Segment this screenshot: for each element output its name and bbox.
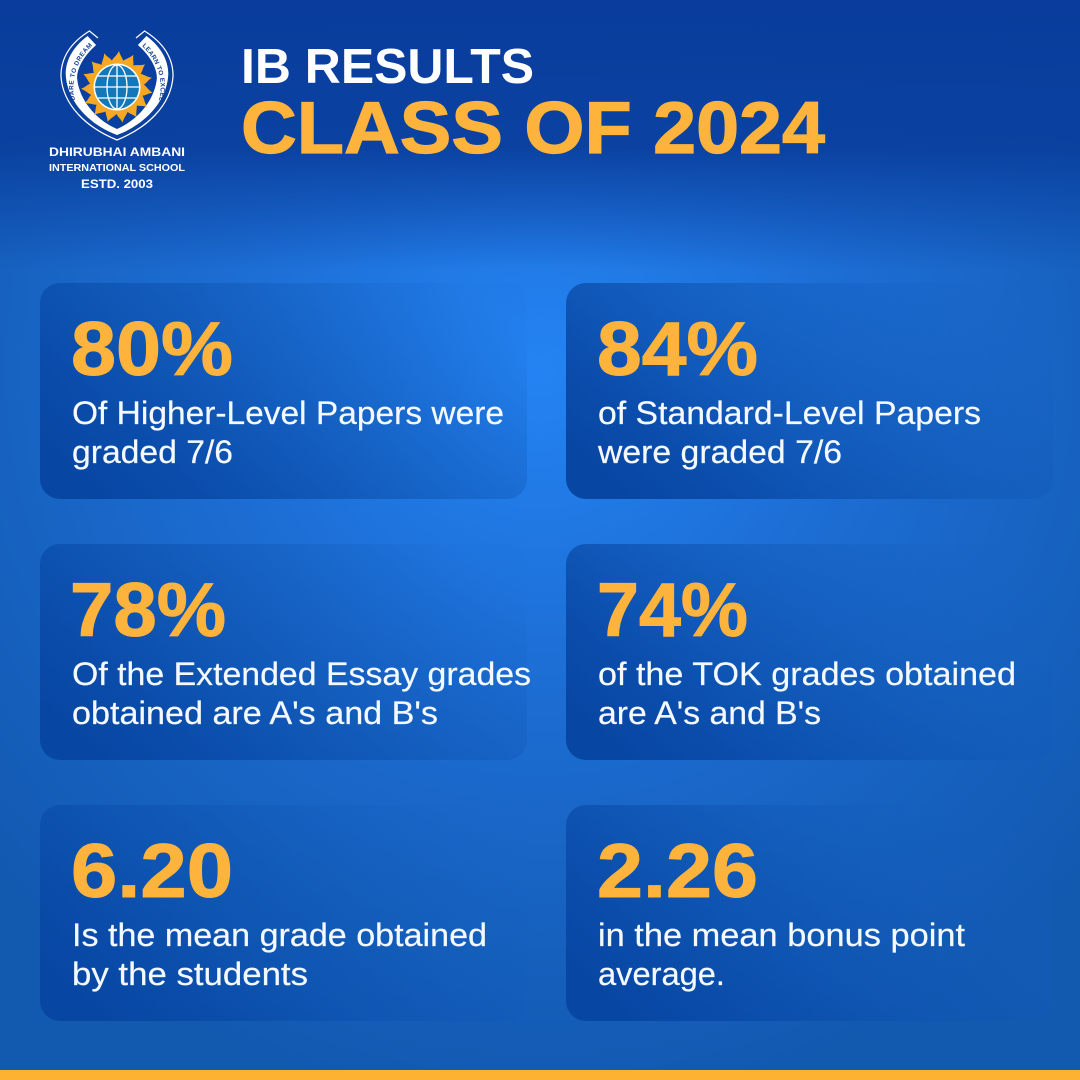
panel: 84% standard-level papers: 84% (597, 307, 758, 392)
logo wordmark: INTERNATIONAL SCHOOL (49, 163, 185, 174)
panel: 84% standard-level papers: of Standard-Level Papers (598, 395, 981, 431)
panel: 78% extended essay: Of the Extended Essay grades (72, 656, 531, 692)
icon: crest (60, 30, 174, 141)
panel: 84% standard-level papers: were graded 7/6 (597, 434, 842, 470)
panel: 80% higher-level papers: Of Higher-Level Papers were (72, 395, 504, 431)
icon: crest: DARE TO DREAM (68, 42, 92, 100)
footer bar (0, 1070, 1080, 1080)
panel: 78% extended essay: 78% (70, 568, 226, 653)
title: IB RESULTS (241, 40, 534, 94)
panel: 74% TOK grades: of the TOK grades obtained (598, 656, 1016, 692)
logo wordmark: ESTD. 2003 (81, 179, 153, 191)
panel: 78% extended essay: obtained are A's and B's (72, 695, 438, 731)
panel: 2.26 mean bonus point: 2.26 (597, 829, 758, 914)
panel: 74% TOK grades: are A's and B's (598, 695, 821, 731)
title (241, 40, 825, 169)
panel: 2.26 mean bonus point (566, 805, 1053, 1021)
panel: 74% TOK grades (566, 544, 1053, 760)
panel: 6.20 mean grade (40, 805, 527, 1021)
logo: Dhirubhai Ambani International School (49, 30, 185, 191)
panel: 6.20 mean grade: 6.20 (71, 829, 233, 914)
logo wordmark: DHIRUBHAI AMBANI (49, 145, 185, 159)
panel: 80% higher-level papers (40, 283, 527, 499)
panel: 6.20 mean grade: by the students (72, 956, 308, 992)
panel: 80% higher-level papers: graded 7/6 (72, 434, 233, 470)
panel: 2.26 mean bonus point: average. (598, 956, 725, 992)
panel: 80% higher-level papers: 80% (71, 307, 233, 392)
panel: 2.26 mean bonus point: in the mean bonus point (598, 917, 965, 953)
title: CLASS OF 2024 (241, 88, 825, 169)
panel: 6.20 mean grade: Is the mean grade obtained (72, 917, 487, 953)
panel: 78% extended essay (40, 544, 531, 760)
icon: crest: LEARN TO EXCEL (142, 43, 166, 100)
logo wordmark (49, 145, 185, 191)
panel: 84% standard-level papers (566, 283, 1053, 499)
panel: 74% TOK grades: 74% (597, 568, 748, 653)
